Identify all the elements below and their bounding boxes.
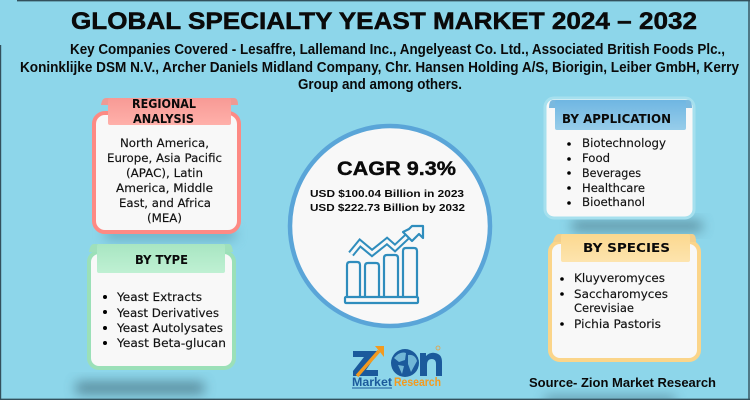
by type heading: BY TYPE	[135, 253, 188, 267]
regional analysis text: (APAC), Latin	[126, 166, 203, 180]
by type list	[103, 290, 226, 350]
panel: cagr circle	[290, 126, 490, 326]
regional analysis heading	[132, 97, 196, 126]
by species list: Cerevisiae	[574, 301, 634, 315]
source note: Source- Zion Market Research	[529, 376, 716, 390]
regional analysis text: America, Middle	[116, 181, 213, 195]
panel: by species	[550, 234, 699, 360]
key companies text: Group and among others.	[298, 77, 462, 93]
by application list: Bioethanol	[582, 195, 645, 209]
by application list	[567, 136, 666, 209]
by species list: Pichia Pastoris	[574, 317, 661, 331]
icon: growth bar chart	[345, 226, 423, 303]
panel: by application	[545, 98, 694, 218]
by application list: Food	[582, 151, 610, 165]
by application heading: BY APPLICATION	[562, 112, 671, 126]
by type list: Yeast Derivatives	[116, 306, 219, 320]
by species list	[560, 271, 668, 331]
regional analysis heading: REGIONAL	[132, 97, 196, 111]
blurred shadow	[572, 221, 702, 231]
regional analysis text: (MEA)	[147, 211, 182, 225]
by type list: Yeast Beta-glucan	[116, 336, 226, 350]
regional analysis text	[107, 136, 222, 225]
cagr value: CAGR 9.3%	[337, 158, 456, 180]
regional analysis text: Europe, Asia Pacific	[107, 151, 222, 165]
logo: zion market research: Market	[352, 377, 392, 389]
by type list: Yeast Extracts	[116, 290, 202, 304]
regional analysis text: North America,	[120, 136, 209, 150]
by species list: Saccharomyces	[574, 287, 668, 301]
regional analysis text: East, and Africa	[119, 196, 211, 210]
market size values	[310, 188, 465, 214]
logo: zion market research	[352, 346, 442, 389]
key companies text	[20, 42, 739, 93]
regional analysis heading: ANALYSIS	[133, 112, 194, 126]
by application list: Healthcare	[582, 181, 645, 195]
by application list: Biotechnology	[582, 136, 666, 150]
by species heading: BY SPECIES	[583, 241, 670, 255]
by type list: Yeast Autolysates	[116, 321, 223, 335]
by application list: Beverages	[582, 166, 641, 180]
market size values: USD $100.04 Billion in 2023	[310, 188, 464, 200]
logo: zion market research: Research	[394, 377, 441, 389]
panel: regional analysis	[94, 97, 239, 240]
by species list: Kluyveromyces	[574, 271, 665, 285]
blurred shadow	[76, 382, 204, 394]
blurred shadow	[545, 396, 675, 400]
panel: by type	[89, 244, 234, 368]
title: GLOBAL SPECIALTY YEAST MARKET 2024 – 2032	[71, 8, 697, 35]
market size values: USD $222.73 Billion by 2032	[310, 202, 465, 214]
